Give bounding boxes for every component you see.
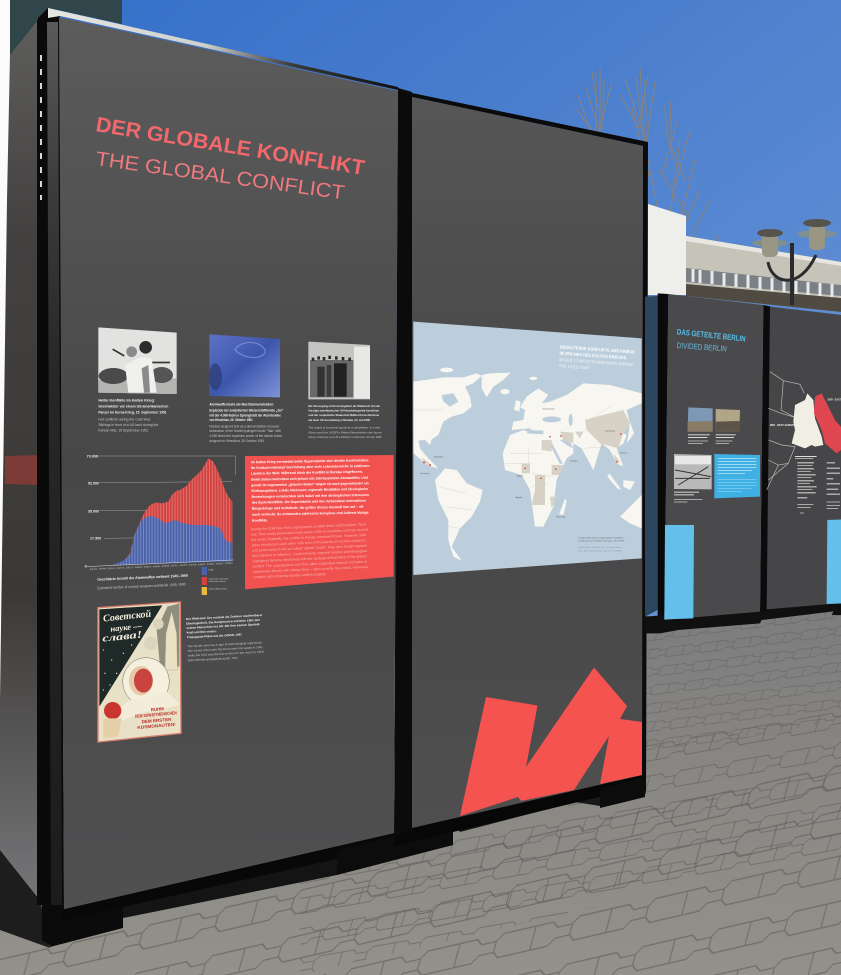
map place labels: Koreakrieg (605, 430, 615, 433)
english paragraph (251, 522, 370, 579)
subheading: DIVIDED BERLIN (677, 341, 727, 353)
poster caption: Kraft und Mut voraus. (187, 629, 217, 635)
right frame column (412, 93, 648, 795)
caption 2 (209, 403, 284, 443)
country border lines (413, 407, 610, 528)
bar chart: nuclear warheads 1945-1990: 17.500 (90, 537, 101, 541)
chart legend: Soviet Union / Russia (209, 580, 226, 583)
german paragraph: Ländern der Welt. Während blieb der Konflikt in Europa eingefroren. (251, 470, 363, 476)
caption 3: Vorzüge amerikanischer US-Haushaltsgeräte bemühten (308, 408, 379, 412)
caption 1: Hot conflicts during the Cold War: (98, 418, 151, 422)
poster caption: Propaganda-Plakat aus der UdSSR, 1961 (187, 632, 242, 639)
english paragraph: aspirations became intertwined with the ideological East-West of the system (252, 554, 367, 563)
building behind exhibition, top left (10, 0, 122, 56)
heading: DAS GETEILTE BERLIN (676, 327, 746, 344)
caption 1: Panzer im Korea-Krieg, 15. September 1951 (98, 410, 167, 414)
photo: nixon and khrushchev at exhibition (308, 342, 370, 399)
german paragraph (251, 458, 370, 523)
map place labels: Angola (516, 496, 523, 499)
german paragraph: Einflusssphären. Lokale Interessen, regionale Rivalitäten und ideologische (251, 487, 368, 493)
map place labels: Nicaragua (420, 472, 430, 475)
east berlin (814, 393, 841, 453)
photo: hydrogen bomb test (209, 334, 280, 397)
english paragraph: their spheres of influence. Local interests, regional rivalries and ideological (252, 549, 367, 558)
english paragraph: and particularly in the so-called "global South", they also fought against (252, 544, 367, 553)
blue block at panel foot (664, 525, 694, 619)
ground shadow under first display (0, 850, 50, 948)
frame between far panels (760, 305, 771, 613)
poster caption: ersten Menschen ins All. Mit ihm kamen Sputnik (186, 622, 260, 630)
map title: IM ZEICHEN DES KALTEN KRIEGES (559, 351, 626, 360)
ground shadow under base (123, 850, 337, 918)
base foot, right (600, 777, 645, 808)
ground shadow under second base (453, 788, 600, 832)
photo: modern buildings (688, 407, 713, 432)
title (94, 113, 366, 204)
caption 1: Heiße Konflikte im Kalten Krieg: (98, 399, 155, 403)
caption 3: The supply of consumer goods as a competition: In a visit (308, 426, 380, 430)
poster caption: Überlegenheit. Die Sowjetunion schickte 1961 den (186, 617, 260, 626)
poster caption: Der Weltraum live erstmal als Zeichen nachholbarer (186, 613, 264, 621)
base foot, left (47, 896, 123, 947)
english paragraph: the world. Relatedly, the conflict in Europe remained frozen. However, both (251, 533, 366, 542)
caption 2: detonation of the Soviet hydrogen bomb "Tsar" with (209, 429, 281, 433)
map place labels: Nigeria (517, 475, 524, 478)
far display base (645, 602, 841, 633)
german paragraph: Beide Seiten bedrohten sich jedoch mit Jahrtausenden Atomwaffen. Und (251, 476, 368, 482)
caption 2: 4,000 times the explosive power of the atomic bomb (209, 434, 282, 438)
poster russian slogan (102, 609, 152, 645)
chart caption: Estimated number of nuclear weapons worldwide 1945–1990 (97, 582, 186, 590)
english paragraph: conflict. The superpowers and their allies supported various civil wars or (253, 560, 368, 569)
caption 1: Geschwister vor einem US-amerikanischen (98, 404, 168, 408)
soviet cosmonaut poster (98, 602, 181, 742)
bar chart: nuclear warheads 1945-1990: 70.000 (87, 454, 98, 458)
caption 2: von Hiroshima, 30. Oktober 1961 (209, 418, 253, 422)
black frame column, left (37, 8, 398, 945)
transit route lines (767, 372, 804, 490)
bar chart: nuclear warheads 1945-1990: 0 (85, 565, 87, 569)
side wall of far display (645, 296, 658, 617)
poster caption: The Soviet union as a sign of technological superiority: (187, 640, 263, 648)
german paragraph: Ihr Konkurrenzkampf durchdrang aber viele Lebensbereiche in zahllosen (251, 464, 369, 470)
map place labels: Somalia (570, 461, 578, 463)
heading german: DER GLOBALE KONFLIKT (94, 113, 366, 180)
caption 3: Die Versorgung mit Konsumgütern als Wettstreit: Um die (308, 404, 380, 408)
map title: MAJOR CONFLICTS AND WARS DURING (559, 357, 635, 367)
german paragraph: des Systemkonflikts. Die Supermächte und ihre Verbündeten unterstützen (252, 499, 366, 505)
central frame column (394, 88, 412, 836)
panel a: das geteilte berlin (664, 294, 763, 620)
poster german slogan (135, 706, 177, 730)
poster area (98, 602, 266, 742)
photo: street scene (674, 454, 712, 489)
bare tree (575, 68, 720, 290)
base rail under panel 1 (60, 833, 394, 922)
image and chart area (85, 327, 394, 595)
caption 3: living in Moscow at a US exhibition in Moscow, 24 July 1959 (308, 435, 382, 439)
poster caption: while the USA was the first to land on the moon in 1969. (188, 650, 265, 658)
german paragraph: Bürgerkriege und Aufstände, die größer dieses Ausmaß nun auf – oft (252, 505, 364, 511)
caption 3: und der sowjetische Staatschef Nikita Chruschtschow (308, 413, 380, 417)
poster caption: The Soviet Union sent the first human into space in 1961, (188, 645, 264, 653)
poster russian slogan: науке — (110, 621, 143, 634)
poster german slogan: KOSMONAUTEN! (137, 722, 176, 730)
highlighted conflict countries (422, 410, 630, 508)
map title: THE COLD WAR (559, 363, 590, 370)
chart caption (97, 574, 188, 590)
poster german slogan: DEM ERSTEN (141, 717, 172, 724)
panel 1: the global conflict (59, 17, 398, 909)
english paragraph: During the Cold War, both superpowers avoided direct confrontation. Their (251, 522, 367, 531)
caption 3: auf einer US-Ausstellung in Moskau, 24. Juli 1959 (308, 418, 370, 422)
caption 2: mit der 4.000-fachen Sprengkraft der Atombombe (209, 414, 281, 418)
panel b: berlin map (767, 307, 841, 609)
map labels (770, 399, 841, 427)
hudson bay and inland seas (442, 393, 573, 464)
street scene caption (674, 492, 702, 502)
blue text box (714, 454, 760, 498)
bar chart: nuclear warheads 1945-1990: 52.500 (88, 482, 99, 486)
ocean (413, 322, 642, 575)
panel 2: world map (412, 97, 643, 828)
german paragraph: gerade im sogenannten „globalen Süden" rangen sie auch gegeneinander um (251, 481, 369, 487)
poster russian slogan: слава! (102, 630, 143, 645)
west berlin (792, 393, 823, 448)
rocket (165, 612, 177, 670)
blue block at panel foot (827, 519, 841, 604)
street lamp (752, 219, 837, 305)
base foot, centre (337, 822, 453, 875)
caption 2: Nuclear weapons test as a demonstration of power: (209, 424, 280, 428)
poster caption (186, 613, 266, 662)
poster russian slogan: Советской (102, 609, 152, 625)
chart legend: USA (209, 569, 214, 572)
german paragraph: auch verdeckt. So entstanden zahlreiche komplexe und äußerst blutige (252, 511, 369, 517)
photo captions (688, 434, 736, 444)
stars (103, 644, 132, 691)
second exhibition group: divided berlin (645, 293, 841, 633)
cosmonaut hood (123, 658, 169, 706)
caption 1 (98, 399, 168, 432)
chart caption: Geschätzte Anzahl der Atomwaffen weltweit 1945–1990 (97, 574, 188, 582)
map footnote: Selected conflicts are shown here (578, 546, 623, 549)
map footnote: for the period up to 1990 (578, 549, 623, 552)
map: major conflicts during the cold war (413, 322, 642, 575)
poster german slogan: RUHM (151, 706, 164, 712)
caption 2: Atomwaffentests als Machtdemonstration: (209, 403, 274, 407)
map place labels: Mosambik (556, 516, 566, 518)
far display frame (658, 293, 668, 623)
white building block (648, 204, 686, 295)
map place labels: Vietnam (620, 451, 627, 454)
caption 1: Korean War, 15 September 1951 (98, 428, 148, 432)
chart legend: Sowjetunion / Russland (209, 577, 229, 580)
display side wall with photo (0, 20, 42, 903)
grey sky behind rocket (157, 603, 179, 667)
poster german slogan: DEM SOWJETMENSCHEN (135, 710, 177, 719)
poster caption: East German propaganda poster, 1961 (188, 656, 239, 662)
paved ground (0, 604, 841, 975)
map place labels (420, 407, 627, 518)
photo: korea war siblings and tank (98, 327, 177, 394)
photo: river scene (716, 409, 740, 432)
red text box (245, 455, 394, 589)
conflict markers (423, 433, 621, 479)
legend text list (795, 456, 840, 513)
map title: BEDEUTENDE KONFLIKTE UND KRIEGE (560, 344, 635, 355)
english paragraph: sides threatened each other with tens of thousands of nuclear weapons, (252, 538, 367, 547)
english paragraph: war. Their rivalry permeated many areas of life in countless countries around (251, 528, 368, 537)
bar chart: nuclear warheads 1945-1990: 1945 1948 1951 1954 1957 1960 1963 1966 1969 1972 1975 1978 1981 1984 1987 1990 (89, 563, 234, 571)
map labels: BRD · WEST GERMANY (770, 424, 797, 427)
continents (413, 368, 642, 561)
long office building (686, 236, 841, 312)
map title (559, 344, 636, 374)
white left margin (0, 0, 12, 860)
caption 3: Nixon and the USSR's Nikita Khrushchev visit home (308, 430, 382, 434)
base rail under panel 2 (394, 775, 645, 846)
german paragraph: Im Kalten Krieg vermieden beide Supermächte eine direkte Konfrontation. (251, 458, 369, 464)
hand with red globe (104, 702, 121, 719)
caption 1: Siblings in front of a US tank during the (98, 423, 158, 427)
chart legend (202, 567, 229, 595)
bar chart: nuclear warheads 1945-1990: 35.000 (88, 509, 99, 513)
english paragraph: complex and extremely bloody conflicts erupted. (253, 572, 326, 579)
map footnote: während des Kalten Krieges bis 1990 (578, 540, 625, 543)
english paragraph: insurrection directly with military force – often covertly. As a result, numerous (253, 565, 368, 574)
map place labels: Guatemala (433, 455, 444, 458)
bar chart: nuclear warheads 1945-1990 (85, 454, 236, 571)
german paragraph: Konflikte. (252, 518, 268, 523)
red logo shape (460, 668, 642, 816)
map place labels: Griechenland (542, 407, 554, 410)
map footnote (578, 536, 625, 552)
heading english: THE GLOBAL CONFLICT (94, 148, 346, 204)
chart legend: andere Atommächte (209, 587, 228, 590)
sky background (0, 0, 841, 640)
caption 2: dropped on Hiroshima, 30 October 1961 (209, 439, 264, 443)
map footnote: Dargestellt sind ausgewählte Konflikte (578, 536, 624, 539)
caption 3 (308, 404, 382, 439)
red text block on side wall (5, 455, 40, 485)
german paragraph: Bestrebungen vermischten sich dabei mit den strategischen Interessen (252, 493, 369, 499)
caption 2: Explosion der sowjetischen Wasserstoffbombe „Zar" (209, 408, 284, 412)
